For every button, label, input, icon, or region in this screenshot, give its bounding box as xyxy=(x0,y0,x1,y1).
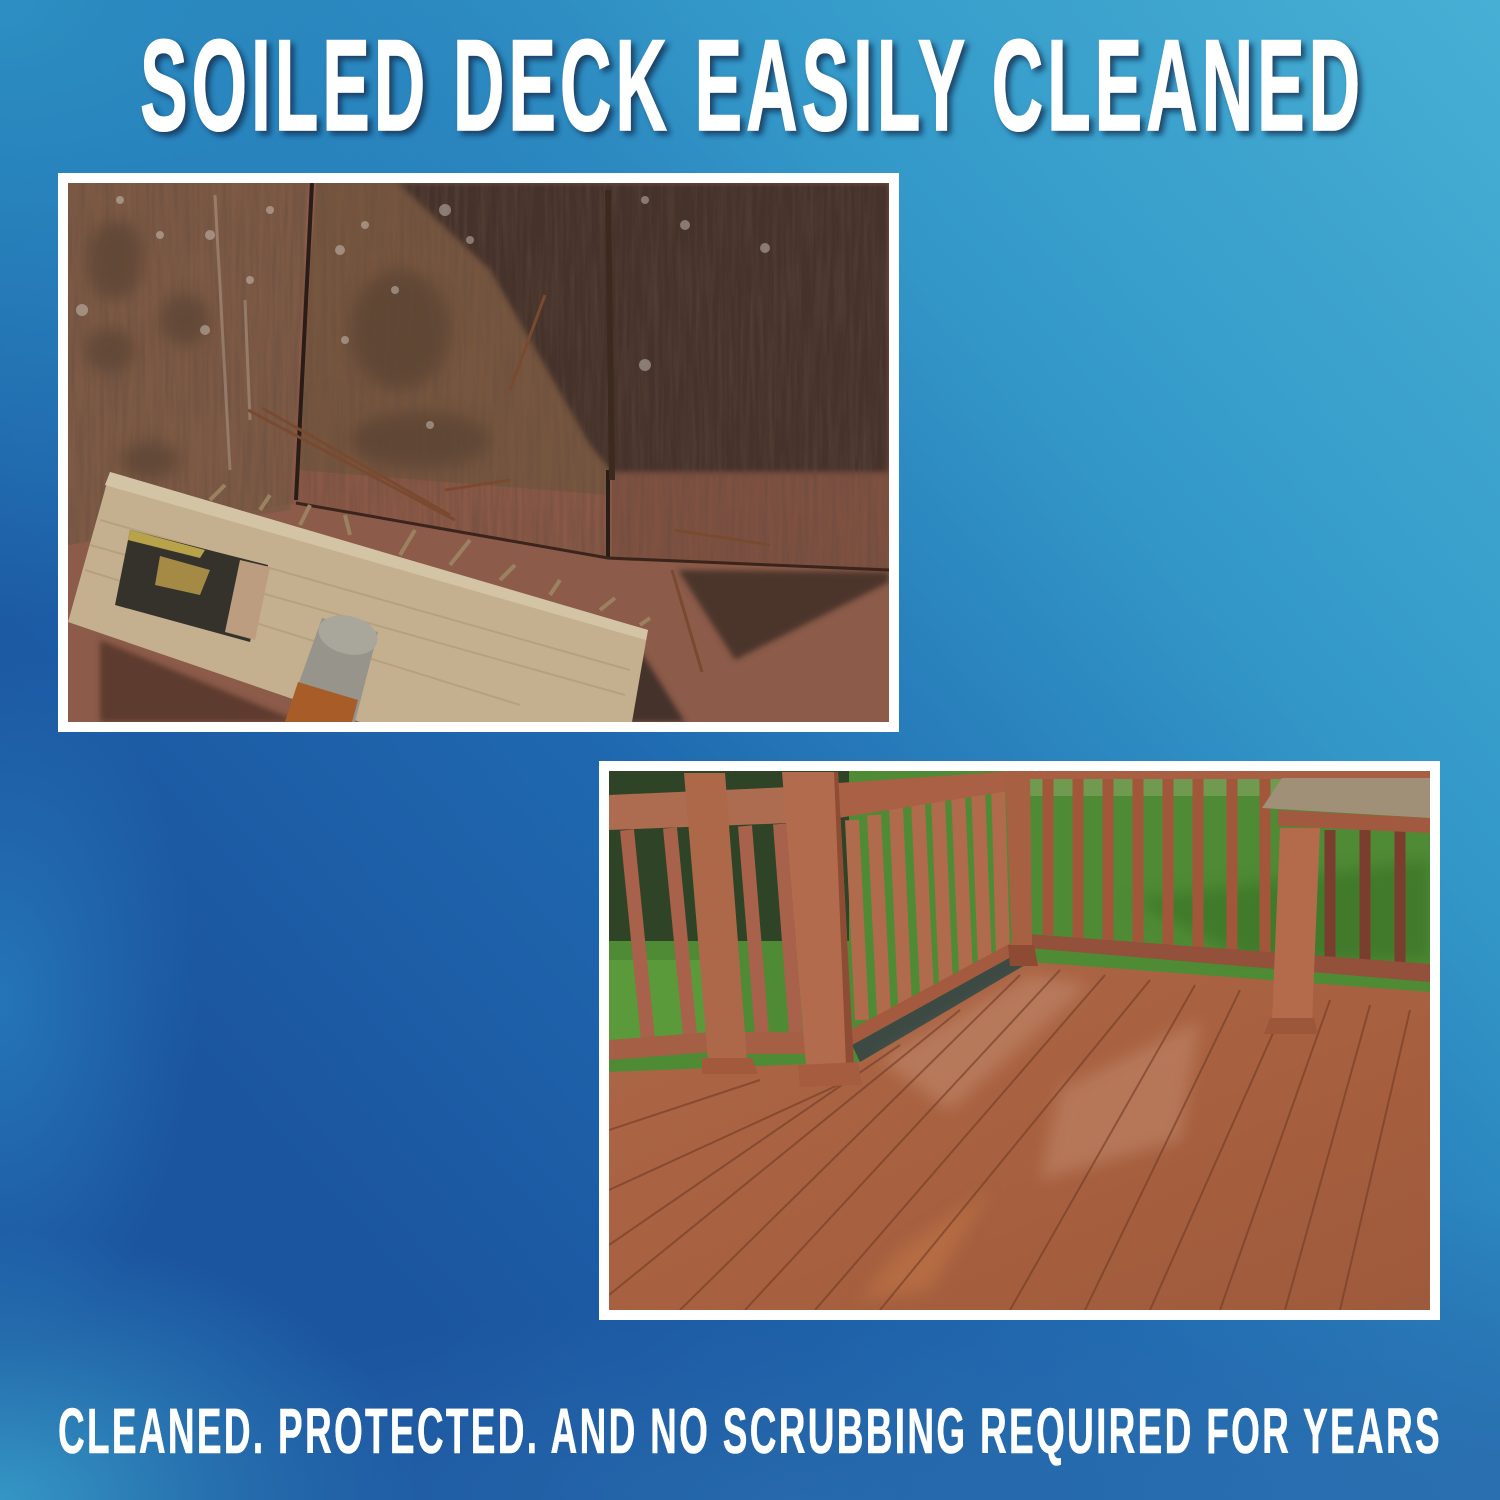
shadow on deck xyxy=(398,183,889,472)
deck plank lines xyxy=(609,970,1410,1310)
water drops xyxy=(76,196,770,429)
pine needles xyxy=(248,295,770,672)
photo: soiled deck being scrubbed xyxy=(58,173,899,732)
broom handle xyxy=(285,618,378,722)
deck floor xyxy=(609,962,1430,1310)
left railing rails xyxy=(609,787,790,830)
broom label xyxy=(115,530,268,642)
photo frame: before xyxy=(58,173,899,732)
left railing balusters xyxy=(627,824,796,1040)
side railing balusters xyxy=(852,783,1003,1020)
plank gaps xyxy=(296,183,608,558)
water sheen xyxy=(215,195,250,470)
bristles xyxy=(210,485,650,625)
before photo content xyxy=(68,183,889,722)
photo frame: after xyxy=(599,761,1440,1320)
photo: clean deck xyxy=(599,761,1440,1320)
wet reflections xyxy=(880,975,1200,1180)
deck posts xyxy=(684,773,747,1060)
dark gap under side railing xyxy=(852,952,1030,1062)
right plank xyxy=(612,470,889,568)
brush shadow xyxy=(100,640,300,722)
middle plank xyxy=(300,183,610,495)
wood grain texture xyxy=(68,183,889,583)
table top and post xyxy=(1262,778,1430,818)
far railing balusters xyxy=(1048,775,1265,955)
left plank xyxy=(68,183,308,545)
lawn xyxy=(609,771,1430,1091)
dark patches on left planks xyxy=(85,220,490,478)
far railing rails xyxy=(1030,771,1430,779)
broom head xyxy=(68,472,648,722)
after photo content xyxy=(609,771,1430,1310)
